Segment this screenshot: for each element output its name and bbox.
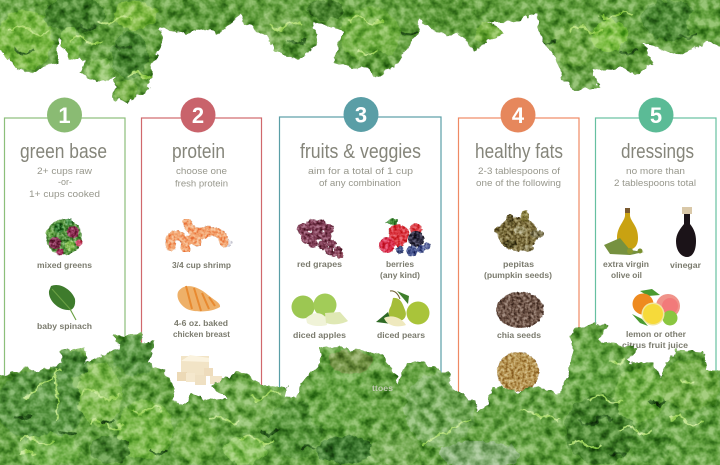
number badge 2: [180, 98, 216, 132]
number badge 5: [638, 98, 674, 132]
panel: protein: [142, 98, 262, 464]
serving text: 2 tablespoons total: [614, 178, 696, 189]
label: vinegar: vinegar: [670, 260, 702, 270]
serving text: [175, 166, 228, 190]
icon: vinegar: [676, 207, 696, 257]
heading: dressings: dressings: [621, 141, 694, 163]
number badge 2: 2: [192, 103, 204, 128]
label: chia seeds: chia seeds: [497, 330, 541, 340]
heading: protein: protein: [172, 141, 225, 163]
label: chicken breast: [173, 318, 230, 339]
serving text: choose one: [176, 166, 227, 177]
label: pepitas: pepitas: [503, 259, 534, 269]
label: diced pears: diced pears: [377, 330, 425, 340]
label: berries: (any kind): [380, 270, 420, 280]
icon: hemp seeds: [497, 352, 539, 392]
icon: red grapes: [297, 219, 344, 258]
icon: citrus fruit: [632, 289, 680, 326]
serving text: of any combination: [319, 178, 401, 189]
label: shrimp: 3/4 cup shrimp: [172, 260, 231, 270]
label: chicken breast: chicken breast: [173, 329, 230, 339]
label: extra virgin olive oil: [603, 259, 649, 280]
panel: healthy fats: [458, 98, 579, 464]
label: citrus juice: citrus fruit juice: [622, 340, 688, 350]
number badge 3: 3: [355, 102, 367, 128]
label: citrus juice: lemon or other: [626, 329, 687, 339]
number badge 4: [500, 98, 536, 132]
icon: olive oil: [604, 208, 644, 255]
serving text: 1+ cups cooked: [29, 189, 100, 200]
serving text: aim for a total of 1 cup: [308, 166, 413, 177]
icon: diced apples: [292, 294, 348, 326]
label: extra virgin olive oil: extra virgin: [603, 259, 649, 269]
number badge 5: 5: [650, 103, 662, 128]
label: extra virgin olive oil: olive oil: [611, 270, 642, 280]
serving text: fresh protein: [175, 178, 228, 190]
label: pepitas: [484, 259, 552, 280]
label: berries: berries: [386, 259, 414, 269]
top lettuce: [0, 0, 720, 110]
icon: baked chicken breast: [177, 286, 220, 311]
panel: dressings: [596, 98, 716, 464]
panel: fruits and veggies: [280, 97, 441, 464]
panel: green base: [4, 98, 125, 464]
serving text: -or-: [58, 177, 72, 188]
bottom lettuce: [0, 320, 720, 465]
serving text: [614, 166, 696, 189]
icon: diced pears: [376, 291, 430, 326]
serving text: [29, 166, 100, 200]
heading: fruits and veggies: fruits & veggies: [300, 141, 421, 163]
serving text: one of the following: [476, 178, 561, 189]
icon: berries: [379, 218, 430, 256]
number badge 4: 4: [512, 103, 525, 128]
heading: healthy fats: healthy fats: [475, 141, 563, 163]
icon: mixed greens: [46, 218, 82, 256]
label: chicken breast: 4-6 oz. baked: [174, 318, 228, 328]
label: diced apples: diced apples: [293, 330, 346, 340]
icon: tofu: [177, 355, 222, 385]
icon: baby spinach: [49, 285, 76, 320]
number badge 1: 1: [58, 103, 71, 128]
heading: green base: green base: [20, 141, 107, 163]
serving text: [308, 166, 413, 189]
label: red grapes: red grapes: [297, 259, 342, 269]
number badge 3: [344, 97, 378, 132]
number badge 1: [47, 98, 82, 132]
icon: chia seeds: [496, 292, 544, 328]
serving text: 2-3 tablespoons of: [478, 166, 560, 177]
label: mixed greens: mixed greens: [37, 260, 92, 270]
label: berries: [380, 259, 420, 280]
icon: shrimp: [170, 222, 232, 249]
serving text: no more than: [626, 166, 685, 177]
label: citrus juice: [622, 329, 688, 350]
label: tomatoes: ttoes: [372, 383, 393, 393]
serving text: [476, 166, 561, 189]
icon: pepitas: [494, 210, 544, 252]
label: pepitas: (pumpkin seeds): [484, 270, 552, 280]
label: baby spinach: baby spinach: [37, 321, 92, 331]
serving text: 2+ cups raw: [37, 166, 92, 177]
